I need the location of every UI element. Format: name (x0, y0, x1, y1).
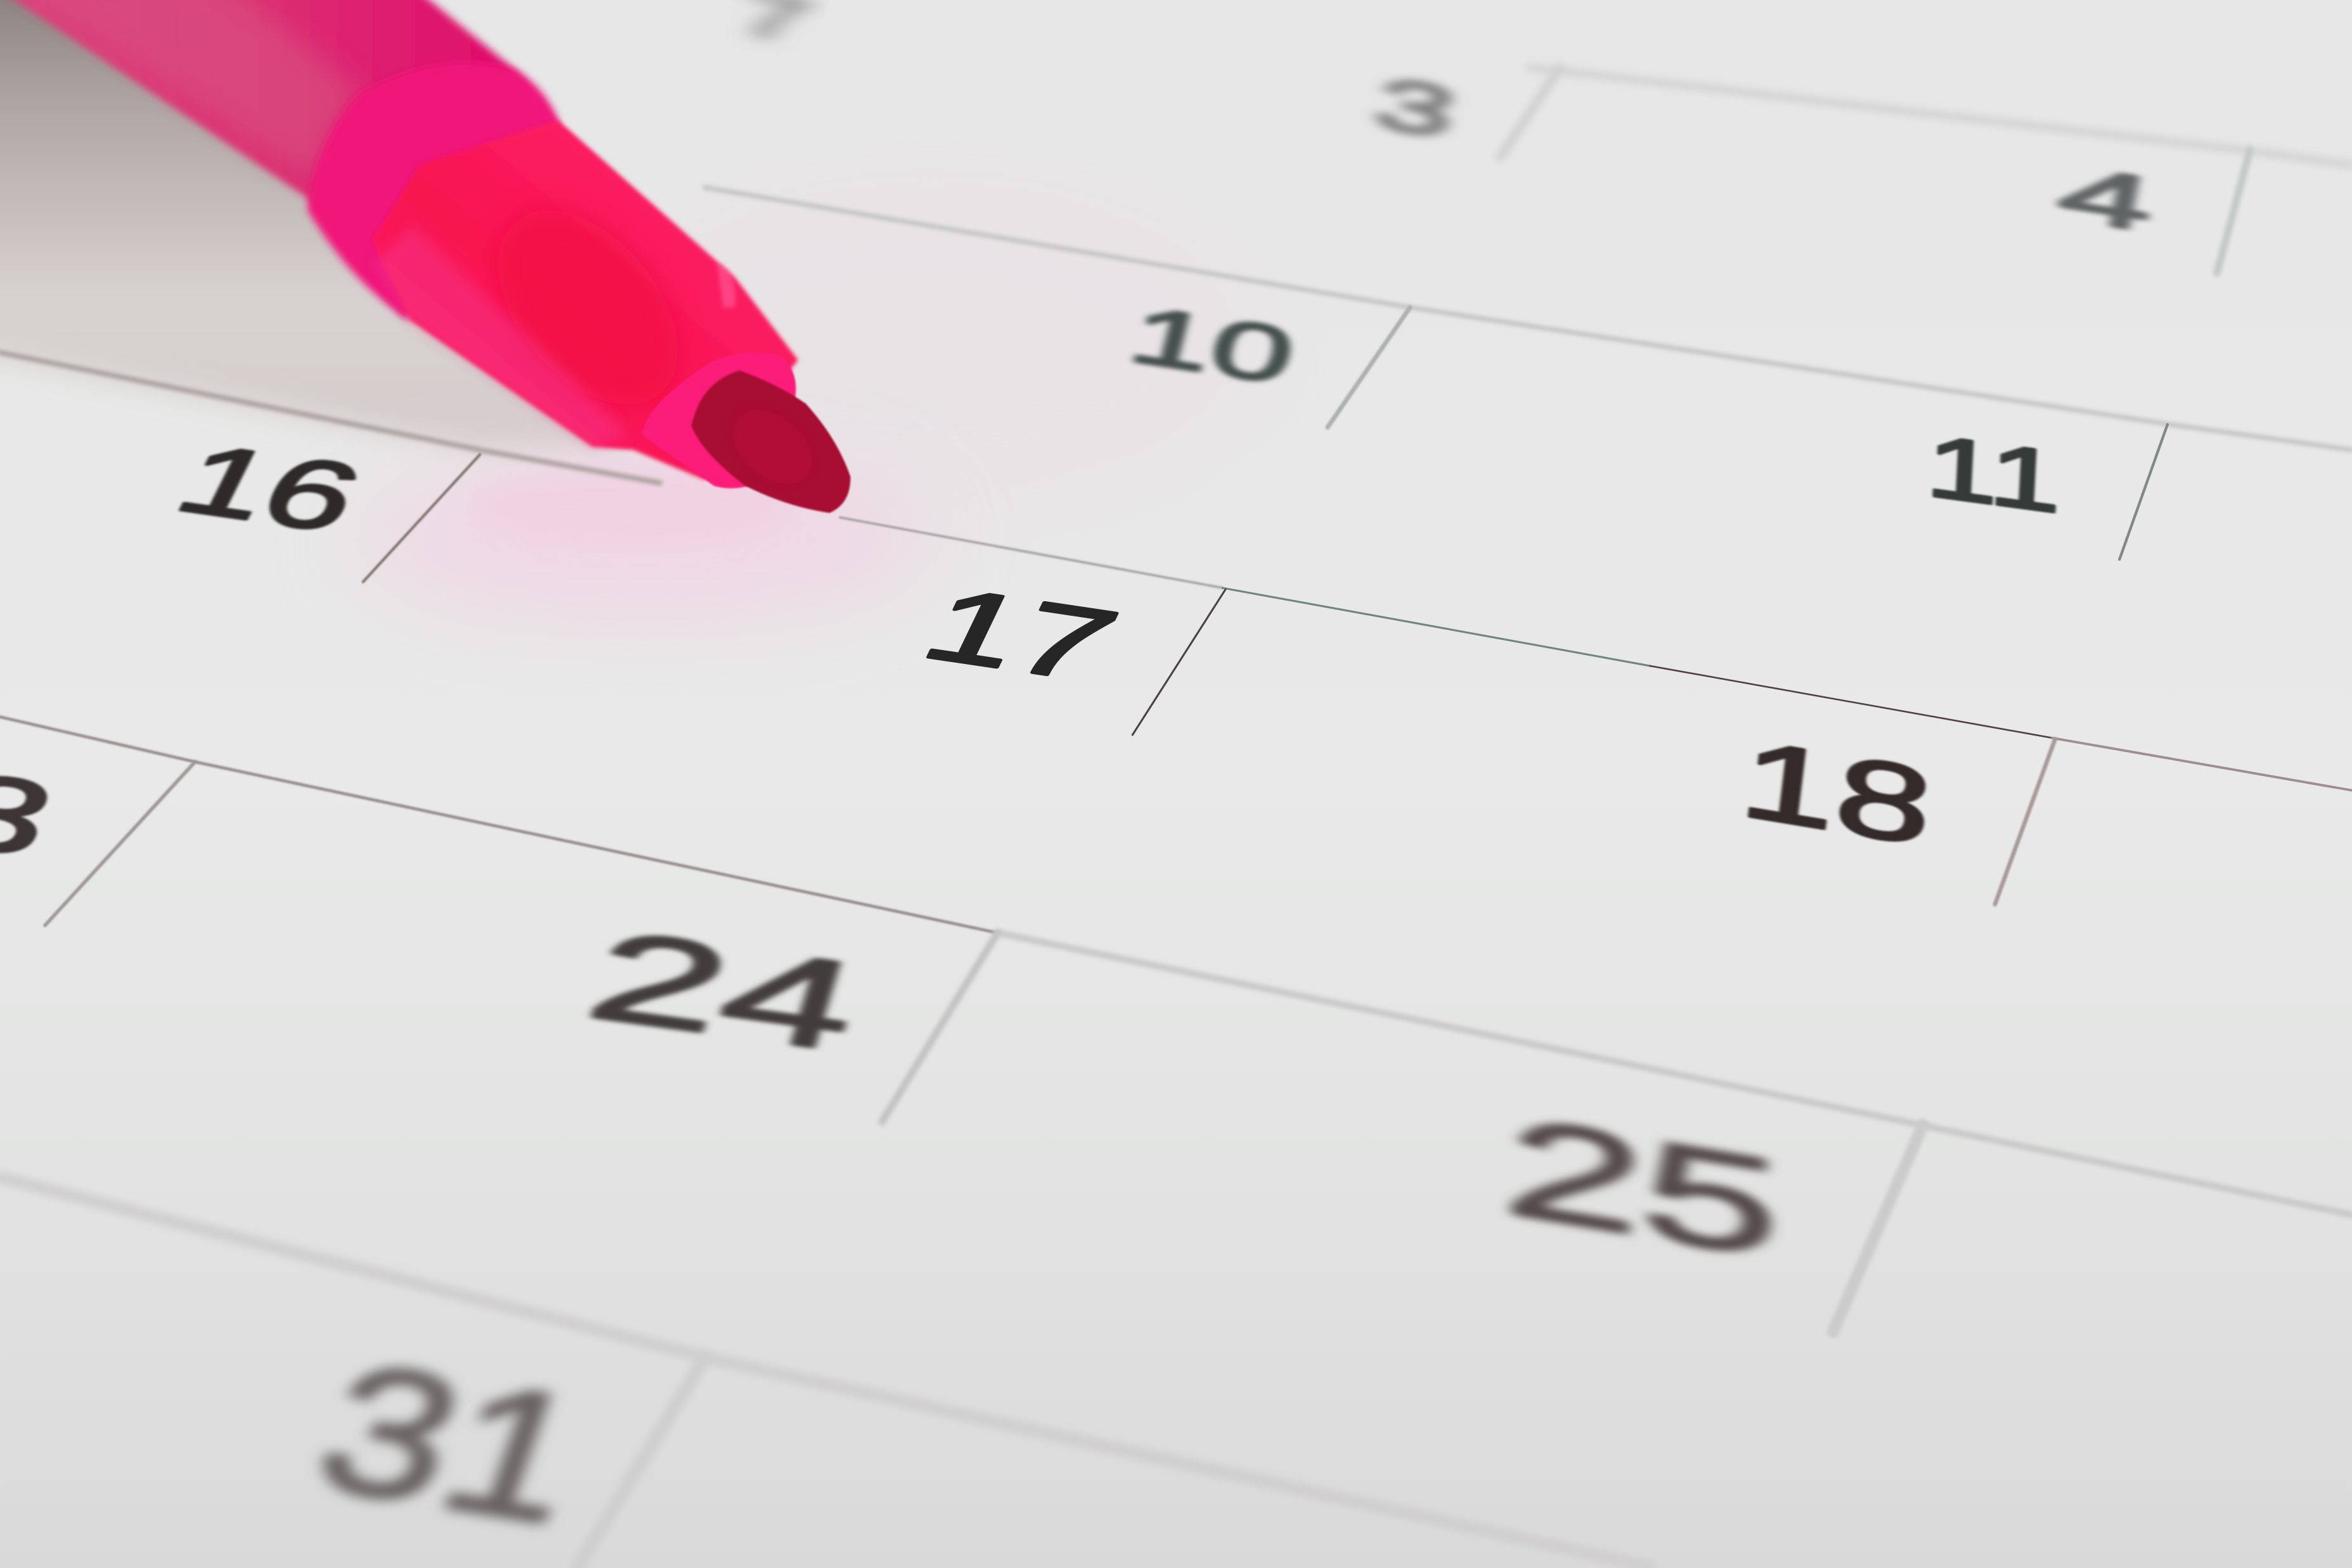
number 31: 31 (294, 1325, 610, 1562)
felt tip (691, 371, 850, 513)
number 3: 3 (1367, 62, 1463, 153)
marker body (0, 0, 558, 318)
nib clip (717, 262, 736, 307)
number 25: 25 (1499, 1087, 1787, 1287)
barrel pale lower edge (375, 225, 630, 447)
number 4: 4 (2052, 150, 2160, 247)
barrel red core (463, 177, 713, 438)
number 16: 16 (160, 424, 379, 552)
marker collar ring (307, 62, 558, 321)
marker body highlight (15, 0, 360, 180)
marker barrel (372, 120, 798, 480)
felt tip shading (719, 395, 826, 499)
number 24: 24 (574, 904, 875, 1077)
number 11: 11 (1924, 417, 2064, 532)
pink marker (0, 0, 850, 513)
number 10: 10 (1121, 290, 1303, 401)
nib collar (642, 352, 796, 488)
number 18: 18 (1734, 717, 1938, 869)
number 17: 17 (907, 567, 1135, 702)
